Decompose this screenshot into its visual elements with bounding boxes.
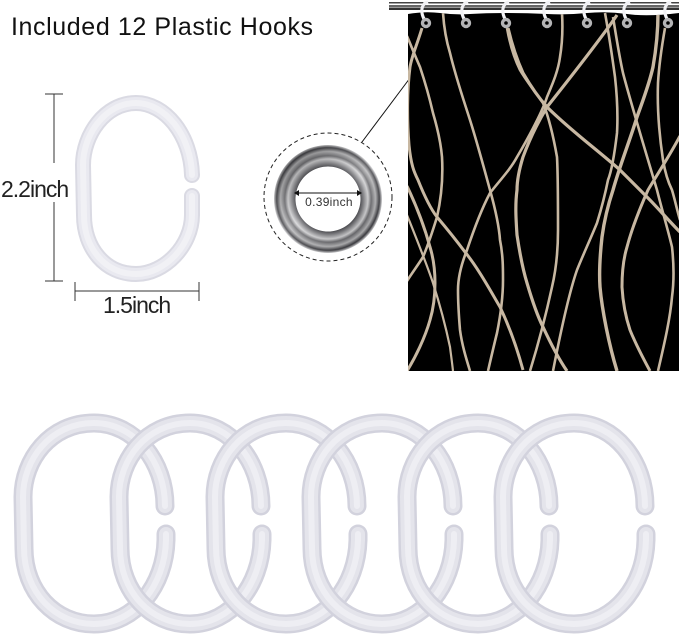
width dimension: 1.5inch bbox=[75, 282, 199, 318]
hook ring 1 bbox=[23, 423, 166, 624]
height dimension: 2.2inch: 2.2inch bbox=[1, 176, 68, 202]
icon: metal grommet bbox=[274, 145, 382, 253]
hook ring 4 bbox=[311, 423, 454, 624]
hook 5 bbox=[584, 2, 590, 26]
diameter label: 0.39inch: 0.39inch bbox=[305, 195, 353, 209]
hook 2 bbox=[462, 2, 470, 26]
hook 7 bbox=[664, 2, 672, 26]
row of six interlocked hooks bbox=[23, 423, 646, 624]
hook ring 3 bbox=[215, 423, 358, 624]
diameter label: 0.39inch bbox=[294, 190, 362, 209]
hook ring 5 bbox=[407, 423, 550, 624]
hook 6 bbox=[624, 2, 630, 26]
curtain rod bbox=[389, 2, 679, 10]
curtain hooks row bbox=[422, 2, 672, 26]
grommet detail callout bbox=[264, 66, 419, 261]
hook ring 6 bbox=[503, 423, 646, 624]
leader line bbox=[362, 66, 419, 142]
hook ring 2 bbox=[119, 423, 262, 624]
hook 3 bbox=[502, 2, 510, 26]
icon: single white plastic hook bbox=[83, 103, 192, 274]
curtain fabric bbox=[408, 0, 679, 371]
height dimension: 2.2inch bbox=[1, 94, 68, 281]
hook 1 bbox=[422, 2, 430, 26]
title: Included 12 Plastic Hooks bbox=[11, 13, 314, 41]
dashed circle bbox=[264, 133, 392, 261]
wavy stripes pattern bbox=[407, 13, 679, 371]
hook 4 bbox=[544, 2, 550, 26]
shower curtain bbox=[389, 0, 679, 371]
single hook with dimensions bbox=[1, 94, 199, 318]
width dimension: 1.5inch: 1.5inch bbox=[103, 292, 170, 318]
